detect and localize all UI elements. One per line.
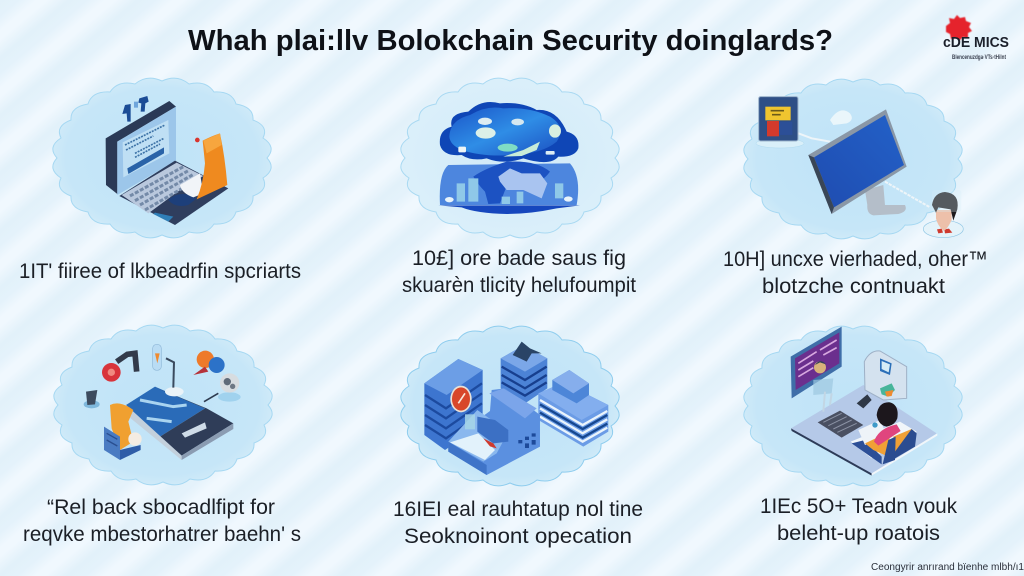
logo tagline: Blencenuzdga·VTs·tHilnt: [952, 55, 1006, 61]
caption 4: reqvke mbestorhatrer baehn' s: [23, 523, 301, 546]
icon: laptop with person: [106, 96, 228, 225]
caption 3: [723, 248, 988, 298]
caption 2: 10£] ore bade saus fig: [412, 247, 626, 270]
blob background: [54, 325, 272, 485]
panel: workstation: [54, 325, 272, 485]
blob background: [744, 79, 962, 239]
panel: laptop: [53, 78, 271, 238]
blob background: [401, 326, 619, 486]
panel: monitor: [744, 79, 963, 239]
title: Whah plai:llv Bolokchain Security doinglards?: [188, 25, 833, 57]
caption 5: Seoknoinont opecation: [404, 525, 632, 548]
caption 2: [402, 247, 636, 297]
caption 2: skuarèn tlicity helufoumpit: [402, 274, 636, 297]
caption 5: 16IEI eal rauhtatup nol tine: [393, 498, 643, 521]
icon: workstation with robot arm and objects: [84, 344, 241, 460]
caption 3: blotzche contnuakt: [762, 275, 945, 298]
caption 6: 1IEc 5O+ Teadn vouk: [760, 495, 957, 518]
caption 4: “Rel back sbocadlfipt for: [47, 496, 275, 519]
logo wordmark: cDE MICS: [943, 35, 1009, 51]
icon: globe cloud: [438, 102, 580, 214]
icon: red splat: [946, 15, 972, 40]
caption 6: [760, 495, 957, 545]
caption 3: 10H] uncxe vierhaded, oher™: [723, 248, 988, 271]
caption 1: 1IT' fiiree of lkbeadrfin spcriarts: [19, 260, 301, 283]
panel: desk with person: [744, 326, 962, 486]
caption 4: [23, 496, 301, 546]
panel: globe cloud: [401, 78, 619, 238]
blob background: [401, 78, 619, 238]
icon: server buildings: [424, 342, 608, 475]
caption 5: [393, 498, 643, 548]
icon: monitor, tablet, person: [756, 97, 963, 238]
logo: [943, 15, 1009, 61]
panel: server buildings: [401, 326, 619, 486]
caption 6: beleht-up roatois: [777, 522, 940, 545]
icon: desk, presentation screen and person: [791, 327, 937, 476]
blob background: [744, 326, 962, 486]
blob background: [53, 78, 271, 238]
footer copyright: Ceongyrir anrırand bïenhe mlbh/ı1: [871, 562, 1024, 573]
